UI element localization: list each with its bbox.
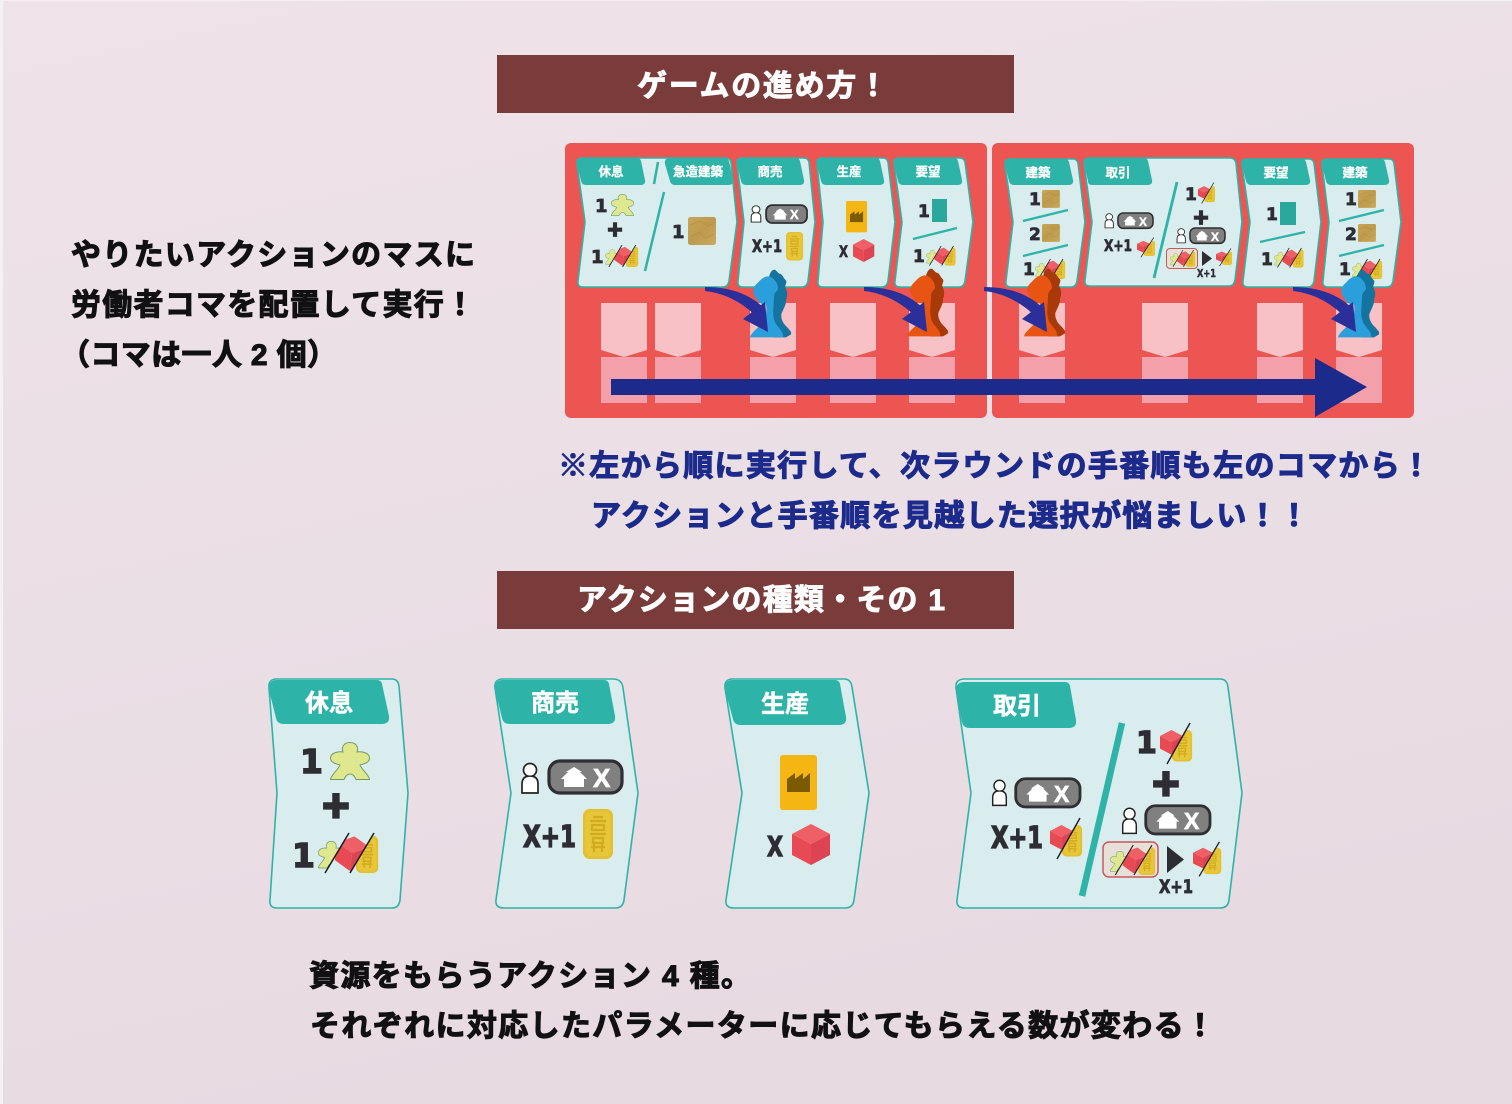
small card: build 2: 1: [1345, 190, 1357, 210]
small card: build 1: 建築: [1025, 165, 1051, 180]
heading: game flow: ゲームの進め方！: [637, 70, 888, 103]
heading: action types: [497, 571, 1014, 629]
worker: blue horse 1: [750, 270, 791, 337]
small card: build 1: 1: [1023, 260, 1035, 280]
small card: build 1: 2: [1029, 225, 1041, 245]
small card: rest / rush build: 急造建築: [673, 164, 723, 179]
small card: build 2: [1322, 159, 1401, 287]
worker slots: [601, 303, 1382, 403]
card: trade: X+1: [1159, 876, 1193, 898]
card: trade: X+1: [991, 821, 1043, 856]
card: rest: 休息: [305, 689, 353, 717]
small card: produce: 生産: [836, 164, 862, 179]
text block: resource actions: [309, 960, 1215, 1043]
arrow: place worker 1: [705, 287, 768, 332]
small card: request 2: [1242, 159, 1321, 287]
small card: trade: +: [1193, 205, 1209, 229]
card: trade: 1: [1136, 726, 1157, 761]
text block: place workers: 労働者コマを配置して実行！: [71, 289, 475, 322]
text block: place workers: やりたいアクションのマスに: [71, 239, 475, 272]
card: trade: X: [1184, 808, 1200, 834]
panel: board round track: [565, 143, 1414, 418]
card: sell: 商売: [531, 690, 579, 717]
small card: build 1: 1: [1029, 190, 1041, 210]
small card: rest / rush build: 1: [591, 247, 604, 268]
small card: trade: X: [1139, 215, 1147, 229]
arrow: place worker 4: [1293, 287, 1356, 332]
arrow: turn order: [611, 358, 1367, 417]
card: rest: [269, 679, 408, 908]
card: produce: 生産: [761, 691, 809, 718]
arrow: place worker 3: [984, 287, 1047, 332]
small card: rest / rush build: [577, 158, 737, 287]
small card: request 2: 要望: [1263, 165, 1289, 180]
heading: action types: アクションの種類・その 1: [577, 584, 945, 617]
small card: request: [894, 158, 973, 287]
card: trade: X: [1054, 781, 1070, 807]
text block: place workers: （コマは一人 2 個）: [60, 339, 337, 372]
small card: request 2: 1: [1261, 250, 1273, 270]
small card: request: 1: [918, 202, 930, 222]
text block: place workers: [60, 239, 475, 372]
card: trade: [956, 679, 1242, 908]
text block: resource actions: それぞれに対応したパラメーターに応じてもらえる数が変わる！: [310, 1009, 1215, 1043]
small card: trade: X+1: [1197, 267, 1216, 280]
note: turn order: [558, 450, 1431, 533]
small card: trade: 取引: [1105, 166, 1131, 180]
panel: left red board: [565, 143, 987, 418]
small card: trade: 1: [1185, 185, 1197, 205]
note: turn order: アクションと手番順を見越した選択が悩ましい！！: [591, 499, 1309, 533]
note: turn order: ※左から順に実行して、次ラウンドの手番順も左のコマから！: [558, 450, 1431, 483]
card: trade: 取引: [993, 693, 1041, 720]
small card: produce: X: [839, 242, 848, 261]
arrow: place worker 2: [864, 287, 927, 332]
card: rest: 1: [292, 836, 315, 875]
card: sell: [495, 679, 638, 908]
small card: produce: [817, 158, 895, 287]
small card: rest / rush build: +: [607, 217, 623, 241]
card: produce: [725, 679, 869, 908]
text block: resource actions: 資源をもらうアクション 4 種。: [309, 960, 751, 993]
small card: sell: 商売: [757, 164, 783, 179]
small card: build 2: 建築: [1342, 165, 1368, 180]
heading: game flow: [497, 55, 1014, 113]
small card: request: 要望: [915, 164, 941, 179]
small card: rest / rush build: 1: [595, 196, 608, 217]
small card: build 2: 2: [1345, 225, 1357, 245]
card: produce: X: [767, 830, 783, 863]
small card: request 2: 1: [1266, 205, 1278, 225]
card: rest: 1: [300, 742, 323, 781]
small card: request: 1: [913, 247, 925, 267]
small card: build 1: [1005, 159, 1085, 287]
small card: sell: X+1: [752, 237, 782, 257]
worker: blue horse 2: [1338, 270, 1379, 337]
small card: trade: [1084, 158, 1242, 286]
card: rest: +: [321, 785, 351, 826]
small card: trade: X: [1211, 230, 1219, 244]
panel: right red board: [992, 143, 1414, 418]
card: trade: +: [1151, 763, 1181, 804]
small card: rest / rush build: 休息: [598, 164, 624, 179]
small card: rest / rush build: 1: [672, 222, 685, 243]
small card: sell: [737, 158, 815, 287]
small card: sell: X: [790, 207, 799, 222]
small card: trade: X+1: [1104, 236, 1132, 255]
worker: orange horse 1: [907, 269, 948, 336]
card: sell: X+1: [523, 820, 576, 855]
small card: build 2: 1: [1339, 260, 1351, 280]
worker: orange horse 2: [1024, 269, 1065, 336]
card: sell: X: [593, 763, 611, 793]
